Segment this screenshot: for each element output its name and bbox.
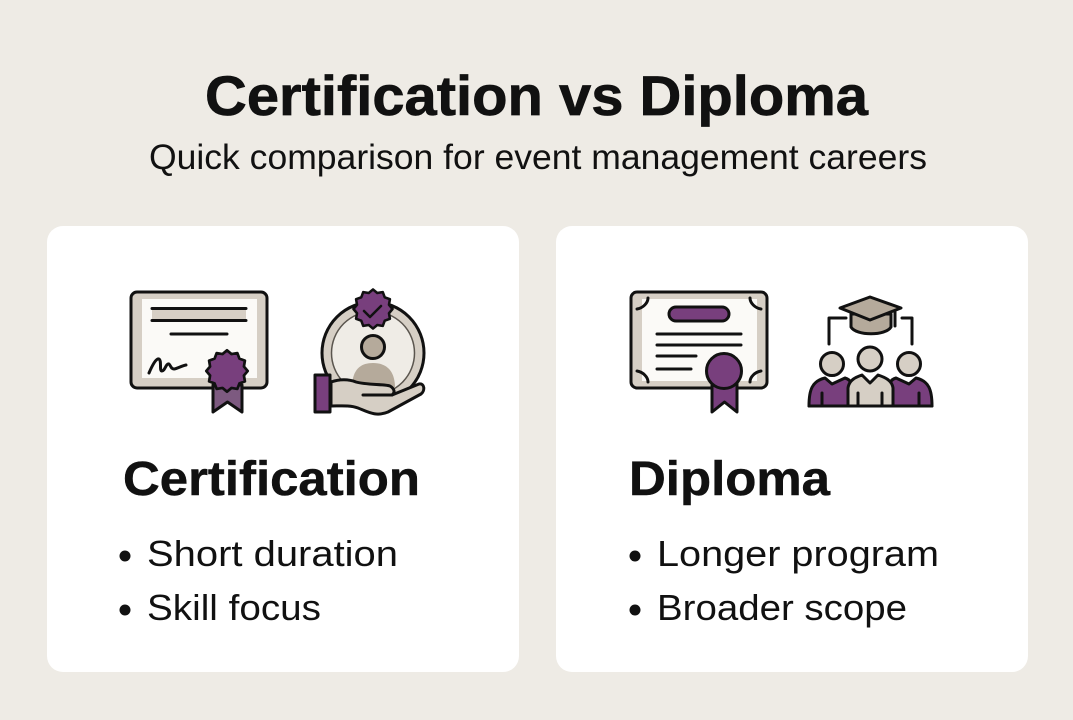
subtitle: Quick comparison for event management careers [149, 138, 927, 177]
heading: certification: Certification [123, 453, 420, 506]
heading: diploma: Diploma [629, 453, 830, 506]
title: Certification vs Diploma [205, 64, 869, 127]
icon: diploma with seal [631, 292, 767, 412]
list: certification points [120, 533, 398, 628]
icon: graduates with cap [809, 297, 932, 406]
list: diploma points [630, 533, 939, 628]
list: diploma points: Broader scope [657, 587, 907, 628]
icon: hand holding person with badge [315, 289, 424, 414]
list: certification points: Skill focus [147, 587, 321, 628]
icon: certificate with rosette [131, 292, 267, 412]
list: diploma points: Longer program [657, 533, 939, 574]
list: certification points: Short duration [147, 533, 398, 574]
panel: certification [47, 226, 519, 672]
panel: diploma [556, 226, 1028, 672]
